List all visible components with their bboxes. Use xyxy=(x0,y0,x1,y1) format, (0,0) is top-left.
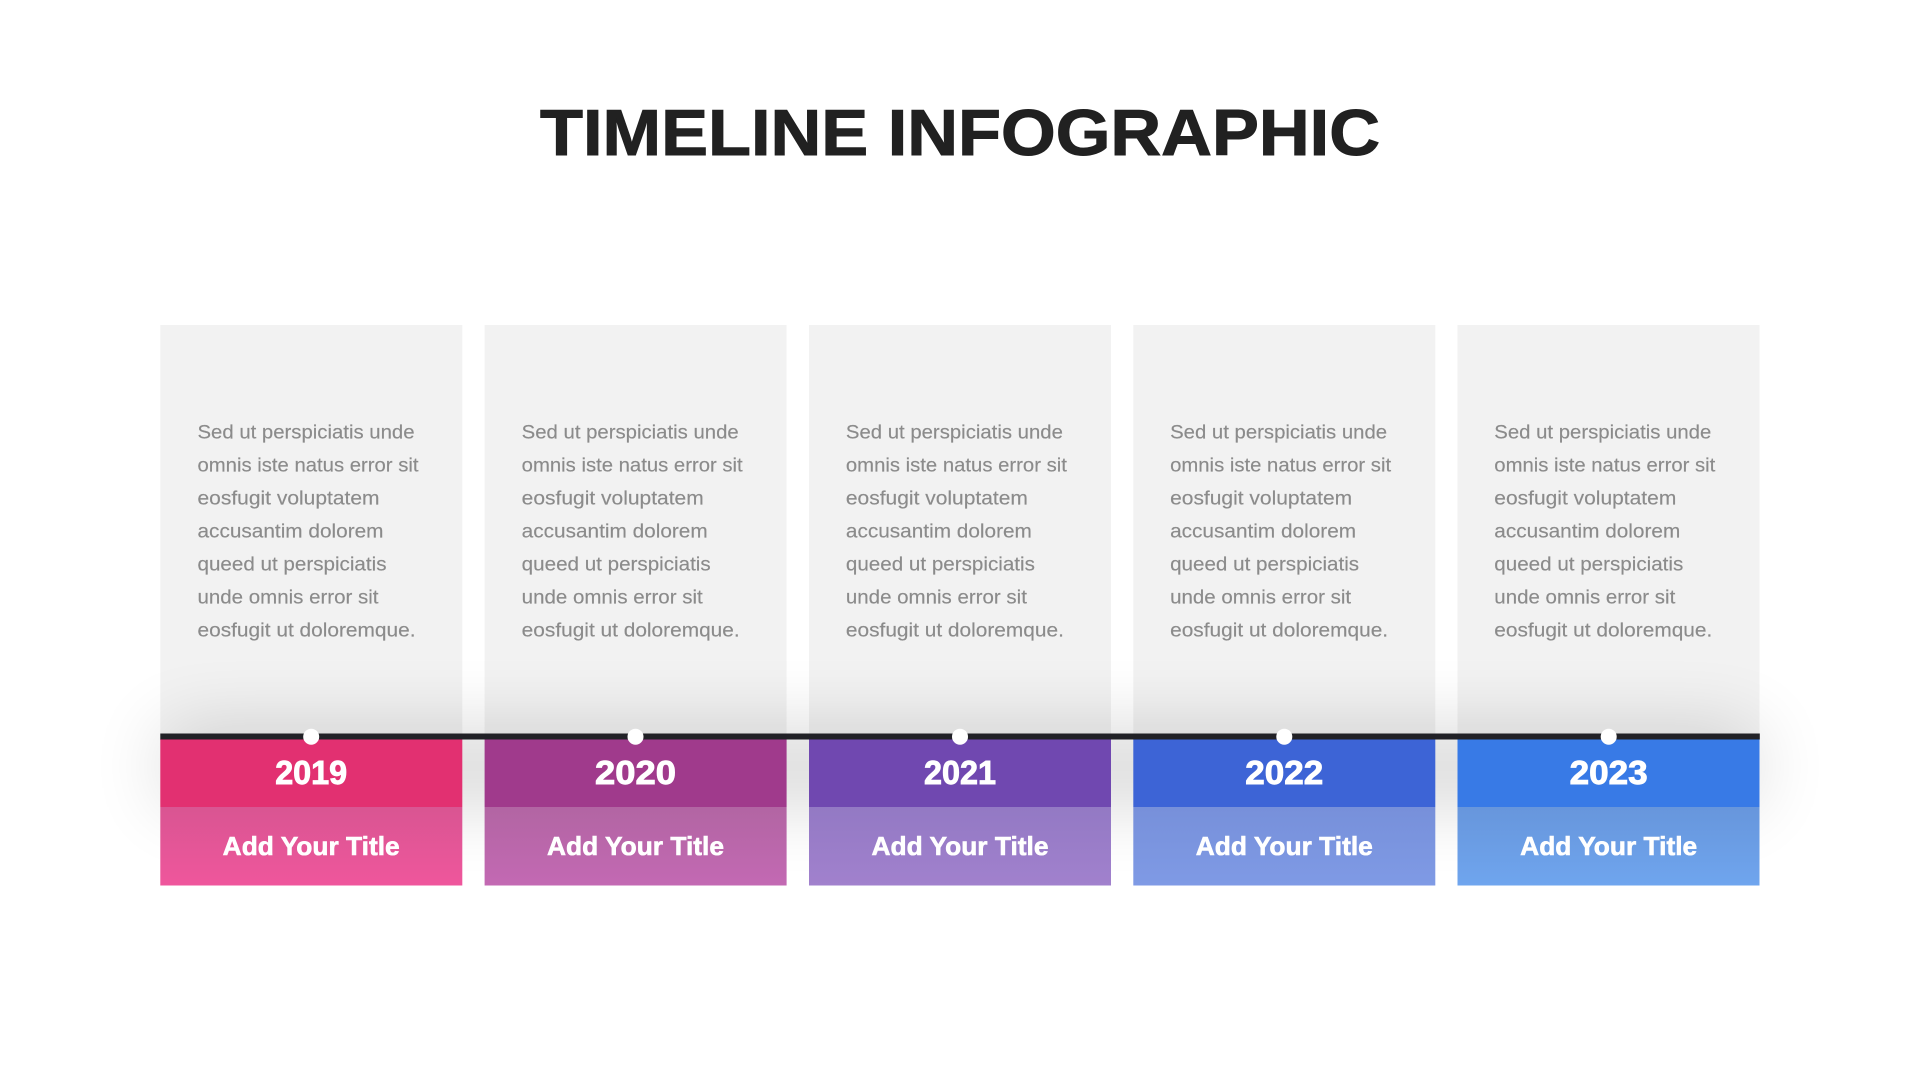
panel: 2021 body: queed ut perspiciatis xyxy=(846,554,1035,575)
panel: 2021 body: Sed ut perspiciatis unde xyxy=(846,422,1063,443)
2022 block xyxy=(1133,739,1435,886)
panel: 2020 body: accusantim dolorem xyxy=(522,521,708,542)
panel: 2023 body: queed ut perspiciatis xyxy=(1494,554,1683,575)
2020 block: Add Your Title xyxy=(547,831,724,861)
panel: 2022 body: omnis iste natus error sit xyxy=(1170,455,1392,476)
panel: 2019 body: accusantim dolorem xyxy=(198,521,384,542)
2020 block: 2020 xyxy=(595,754,676,791)
panel: 2023 body xyxy=(1458,325,1760,740)
panel: 2020 body: Sed ut perspiciatis unde xyxy=(522,422,739,443)
2022 block: Add Your Title xyxy=(1196,831,1373,861)
panel: 2020 body xyxy=(485,325,787,740)
2023 block: Add Your Title xyxy=(1520,831,1697,861)
panel: 2023 body: Sed ut perspiciatis unde xyxy=(1494,422,1711,443)
2019 block xyxy=(160,739,462,886)
panel: 2022 body: eosfugit voluptatem xyxy=(1170,488,1352,509)
panel: 2022 body: unde omnis error sit xyxy=(1170,587,1352,608)
panel: 2020 body: omnis iste natus error sit xyxy=(522,455,743,476)
panel: 2019 body: queed ut perspiciatis xyxy=(198,554,386,575)
panel: 2019 body: omnis iste natus error sit xyxy=(198,455,419,476)
panel: 2021 body: eosfugit ut doloremque. xyxy=(846,620,1064,641)
title: TIMELINE INFOGRAPHIC xyxy=(540,96,1380,169)
panel: 2020 body: eosfugit voluptatem xyxy=(522,488,704,509)
panel: 2021 body: accusantim dolorem xyxy=(846,521,1032,542)
panel: 2022 body: accusantim dolorem xyxy=(1170,521,1356,542)
panel: 2019 body xyxy=(160,325,462,740)
panel: 2019 body: eosfugit ut doloremque. xyxy=(198,620,416,641)
panel: 2023 body: eosfugit ut doloremque. xyxy=(1494,620,1712,641)
panel: 2021 body: unde omnis error sit xyxy=(846,587,1028,608)
panel: 2019 body: Sed ut perspiciatis unde xyxy=(198,422,414,443)
band shadow xyxy=(165,730,1755,802)
timeline line xyxy=(160,734,1760,740)
panel: 2022 body: eosfugit ut doloremque. xyxy=(1170,620,1388,641)
2020 block xyxy=(485,739,787,886)
panel: 2021 body: omnis iste natus error sit xyxy=(846,455,1068,476)
panel: 2023 body: unde omnis error sit xyxy=(1494,587,1676,608)
panel: 2020 body: queed ut perspiciatis xyxy=(522,554,711,575)
panel: 2023 body: accusantim dolorem xyxy=(1494,521,1680,542)
panel: 2022 body xyxy=(1133,325,1435,740)
panel: 2019 body: unde omnis error sit xyxy=(198,587,379,608)
panel: 2020 body: unde omnis error sit xyxy=(522,587,703,608)
2023 block xyxy=(1458,739,1760,886)
panel: 2020 body: eosfugit ut doloremque. xyxy=(522,620,740,641)
2019 block: Add Your Title xyxy=(223,831,400,861)
2022 block: 2022 xyxy=(1245,754,1323,791)
2021 block: 2021 xyxy=(924,754,996,791)
2021 block xyxy=(809,739,1111,886)
panel: 2021 body: eosfugit voluptatem xyxy=(846,488,1028,509)
panel: 2022 body: queed ut perspiciatis xyxy=(1170,554,1359,575)
panel: 2022 body: Sed ut perspiciatis unde xyxy=(1170,422,1387,443)
2019 block: 2019 xyxy=(275,754,347,791)
2021 block: Add Your Title xyxy=(872,831,1048,861)
panel: 2021 body xyxy=(809,325,1111,740)
2023 block: 2023 xyxy=(1570,754,1648,791)
panel: 2023 body: eosfugit voluptatem xyxy=(1494,488,1676,509)
panel: 2023 body: omnis iste natus error sit xyxy=(1494,455,1716,476)
timeline dots xyxy=(303,729,1617,745)
panel: 2019 body: eosfugit voluptatem xyxy=(198,488,380,509)
